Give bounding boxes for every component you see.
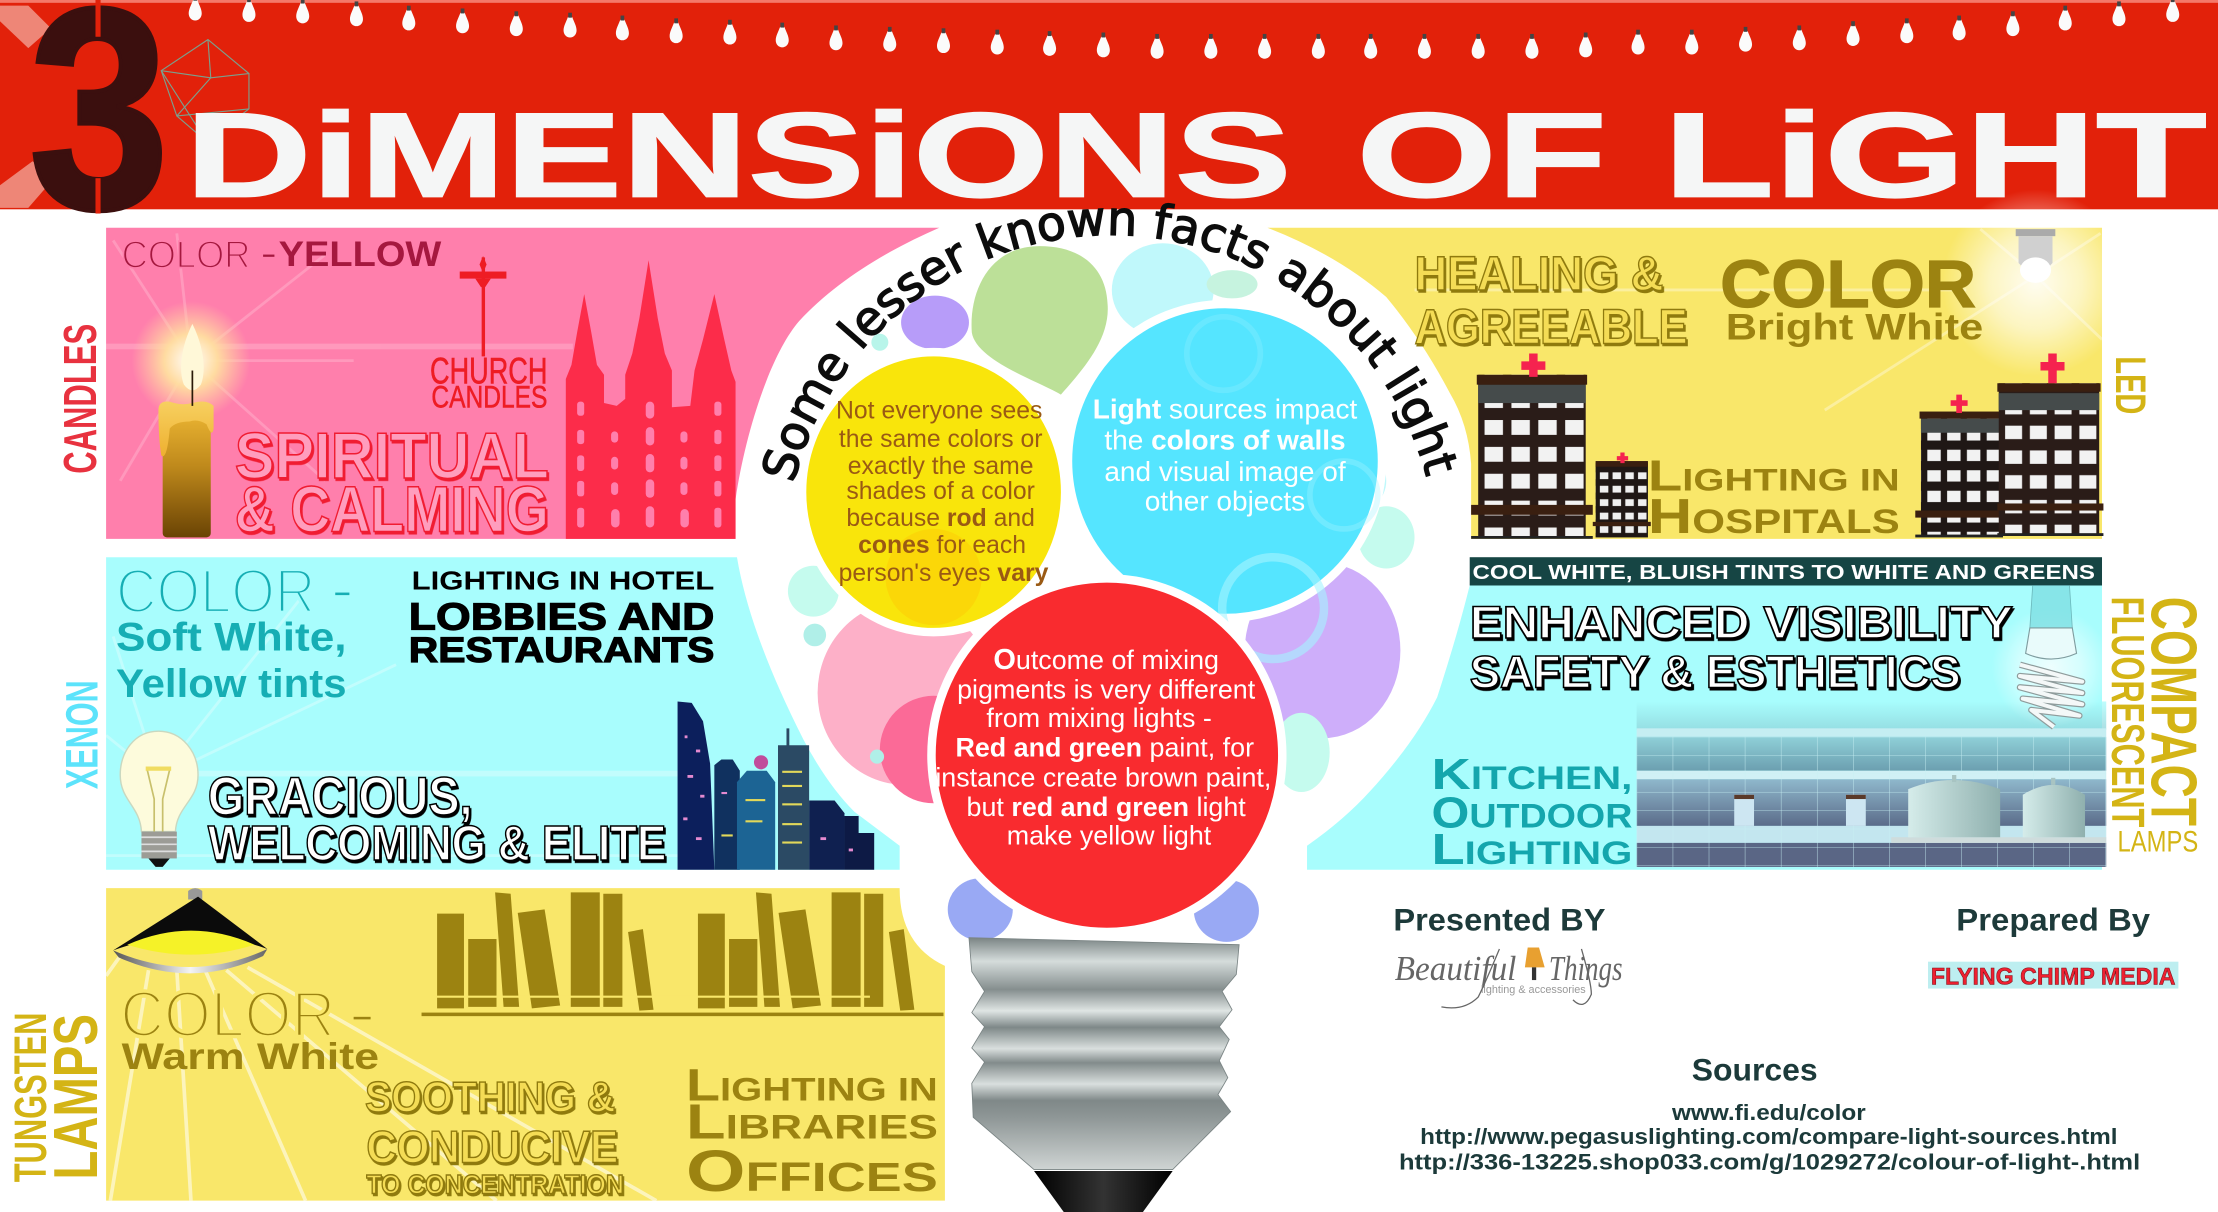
books on shelf	[422, 892, 943, 1016]
cool white heading bar: COOL WHITE, BLUISH TINTS TO WHITE AND GREENS	[1473, 561, 2095, 584]
color label: COLOR	[116, 557, 315, 626]
circle: red fact: from mixing lights -	[986, 703, 1212, 733]
title: OF	[1357, 89, 1607, 223]
header banner	[0, 0, 2218, 269]
icon: city skyline	[678, 701, 874, 870]
circle: red fact	[931, 578, 1282, 932]
label: led: LED	[2107, 356, 2154, 414]
circle: blue fact: other objects	[1145, 486, 1305, 517]
icon: ceiling lamp	[2016, 229, 2055, 283]
cool white heading bar	[1470, 557, 2102, 585]
prepared by	[1928, 903, 2178, 990]
circle: yellow fact: cones for each	[858, 532, 1026, 559]
presented by heading: Presented BY	[1393, 903, 1606, 938]
label: tungsten lamps: TUNGSTEN	[5, 1013, 56, 1182]
panel: led	[1267, 190, 2129, 544]
lamp light rays	[106, 956, 656, 1201]
beautiful things logo: lighting & accessories	[1481, 984, 1586, 996]
soothing text: CONDUCIVE	[366, 1122, 618, 1173]
circle: red fact: but red and green light	[967, 792, 1246, 822]
color label: Warm White	[122, 1036, 379, 1077]
label: candles: CANDLES	[54, 324, 106, 474]
kitchen shelves illustration	[1637, 701, 2106, 867]
church candles caption	[430, 350, 547, 414]
gracious text: WELCOMING & ELITE	[208, 816, 666, 871]
circle: blue fact: the colors of walls	[1104, 425, 1346, 456]
color label	[120, 978, 379, 1077]
icon: hospital medium	[1915, 395, 2003, 537]
lighting in hotel text: LIGHTING IN HOTEL	[412, 568, 714, 596]
color label: Soft White,	[116, 616, 347, 660]
yellow background	[1267, 228, 2102, 539]
lighting in libraries text	[686, 1059, 938, 1204]
title: LiGHT	[1664, 89, 2207, 223]
label: compact fluorescent lamps: FLUORESCENT	[2102, 597, 2154, 827]
source links: www.fi.edu/color	[1671, 1100, 1866, 1125]
label: compact fluorescent lamps: LAMPS	[2118, 825, 2198, 858]
icon: cross	[460, 256, 506, 356]
circle: yellow fact: exactly the same	[848, 453, 1034, 480]
bulb screw base	[969, 938, 1239, 1170]
icon: hospital small	[1593, 453, 1651, 537]
label: compact fluorescent lamps	[2102, 597, 2211, 858]
panel: candles	[106, 228, 939, 546]
label: tungsten lamps: LAMPS	[42, 1014, 111, 1179]
color label: COLOR	[122, 233, 250, 276]
icon: hospital large	[1471, 354, 1593, 539]
circle: yellow fact	[802, 352, 1065, 632]
label: compact fluorescent lamps: COMPACT	[2138, 597, 2211, 826]
circle: red fact: make yellow light	[1007, 820, 1212, 850]
light beams left	[0, 6, 57, 208]
lighting in hospitals text: L IGHTING IN	[1648, 452, 1900, 501]
icon: hanging lamp	[113, 888, 267, 973]
circle: red fact: pigments is very different	[957, 675, 1256, 705]
prepared by heading: Prepared By	[1956, 903, 2151, 938]
sources heading: Sources	[1692, 1052, 1818, 1087]
color label: Yellow tints	[116, 662, 347, 706]
pink background	[106, 228, 939, 539]
central light bulb	[762, 202, 1457, 1212]
color bright white: Bright White	[1726, 306, 1983, 347]
spiritual and calming text: SPIRITUAL	[235, 419, 549, 492]
icon: compact fluorescent bulb	[1992, 585, 2110, 727]
icon: hospital right	[1997, 354, 2103, 536]
lighting in libraries text: L IBRARIES	[686, 1094, 938, 1149]
presented by	[1393, 903, 1622, 1008]
lighting in hospitals text: H OSPITALS	[1648, 489, 1900, 544]
circle: blue fact: and visual image of	[1104, 456, 1346, 487]
spiritual and calming text: & CALMING	[235, 473, 549, 546]
circle: yellow fact: person's eyes vary	[839, 560, 1049, 587]
healing text	[1415, 247, 1688, 355]
circle: red fact: instance create brown paint,	[935, 762, 1271, 792]
beautiful things logo: Things	[1549, 948, 1622, 988]
enhanced visibility text: SAFETY & ESTHETICS	[1470, 646, 1961, 697]
teal background	[1307, 585, 2102, 870]
yellow background	[106, 888, 945, 1201]
source links: http://336-13225.shop033.com/g/1029272/colour-of-light-.html	[1399, 1150, 2140, 1175]
top highlight strip	[0, 0, 2218, 3]
lighting in hospitals text	[1648, 452, 1900, 544]
circle: blue fact: Light sources impact	[1093, 394, 1357, 425]
source links: http://www.pegasuslighting.com/compare-light-sources.html	[1420, 1124, 2118, 1149]
bulb black tip	[1034, 1171, 1173, 1212]
title	[185, 89, 2207, 223]
label: xenon: XENON	[57, 680, 108, 789]
color label: YELLOW	[279, 235, 442, 274]
enhanced visibility text: ENHANCED VISIBILITY	[1470, 597, 2013, 648]
healing text: HEALING &	[1415, 247, 1664, 301]
led glow and rays	[1415, 190, 2129, 410]
source links	[1399, 1100, 2140, 1175]
teal background	[106, 557, 900, 870]
gracious text: GRACIOUS,	[208, 767, 472, 827]
circle: yellow fact: Not everyone sees	[836, 398, 1042, 425]
title: DiMENSiONS	[185, 89, 1291, 223]
gracious text	[208, 767, 666, 871]
beautiful things logo	[1395, 948, 1622, 1008]
church candles caption: CANDLES	[431, 379, 547, 414]
lighting in hotel text: LOBBIES AND	[409, 595, 714, 638]
color label	[122, 233, 442, 276]
spiritual and calming text	[235, 419, 549, 546]
icon: church silhouette	[566, 260, 736, 539]
wireframe cube icon	[161, 40, 249, 141]
icon: light bulb	[120, 731, 198, 867]
healing text: AGREEABLE	[1415, 300, 1688, 355]
lighting in libraries text: L IGHTING IN	[686, 1059, 938, 1110]
soothing text: TO CONCENTRATION	[366, 1170, 624, 1200]
arc heading: Some lesser known facts about light	[762, 202, 1457, 481]
color label: COLOR	[120, 978, 335, 1051]
lighting in libraries text: O FFICES	[686, 1140, 938, 1204]
icon: candle	[132, 301, 250, 537]
translucent background petals	[788, 243, 1415, 942]
lighting in hotel text	[409, 568, 714, 670]
church candles caption: CHURCH	[430, 350, 547, 391]
lighting in hotel text: RESTAURANTS	[409, 631, 714, 670]
circle: blue fact	[1068, 304, 1382, 659]
banner background	[0, 0, 2218, 209]
label: tungsten lamps	[5, 1013, 111, 1182]
kitchen outdoor lighting text: OUTDOOR	[1432, 788, 1632, 837]
circle: yellow fact: shades of a color	[846, 478, 1035, 505]
color label	[116, 557, 349, 706]
panel: xenon	[106, 557, 900, 871]
circle: red fact: Outcome of mixing	[993, 644, 1219, 676]
flying chimp media logo: FLYING CHIMP MEDIA	[1931, 963, 2176, 990]
circle: yellow fact: the same colors or	[839, 426, 1042, 453]
circle: yellow fact: because rod and	[846, 505, 1035, 532]
string of bulbs	[189, 0, 2179, 59]
kitchen outdoor lighting text: K ITCHEN,	[1432, 750, 1632, 799]
panel: tungsten lamps	[106, 888, 945, 1204]
enhanced visibility text	[1470, 597, 2013, 697]
kitchen outdoor lighting text	[1432, 750, 1632, 874]
color bright white	[1720, 248, 1983, 347]
panel: compact fluorescent	[1307, 557, 2110, 874]
soothing text	[365, 1074, 624, 1200]
soothing text: SOOTHING &	[365, 1074, 615, 1121]
beautiful things logo: Beautiful	[1395, 948, 1517, 988]
sources	[1399, 1052, 2140, 1175]
candle light rays	[106, 233, 573, 481]
kitchen outdoor lighting text: L IGHTING	[1432, 825, 1632, 874]
xenon light rays	[106, 594, 679, 856]
color bright white: COLOR	[1720, 248, 1976, 322]
circle: red fact: Red and green paint, for	[955, 733, 1254, 763]
